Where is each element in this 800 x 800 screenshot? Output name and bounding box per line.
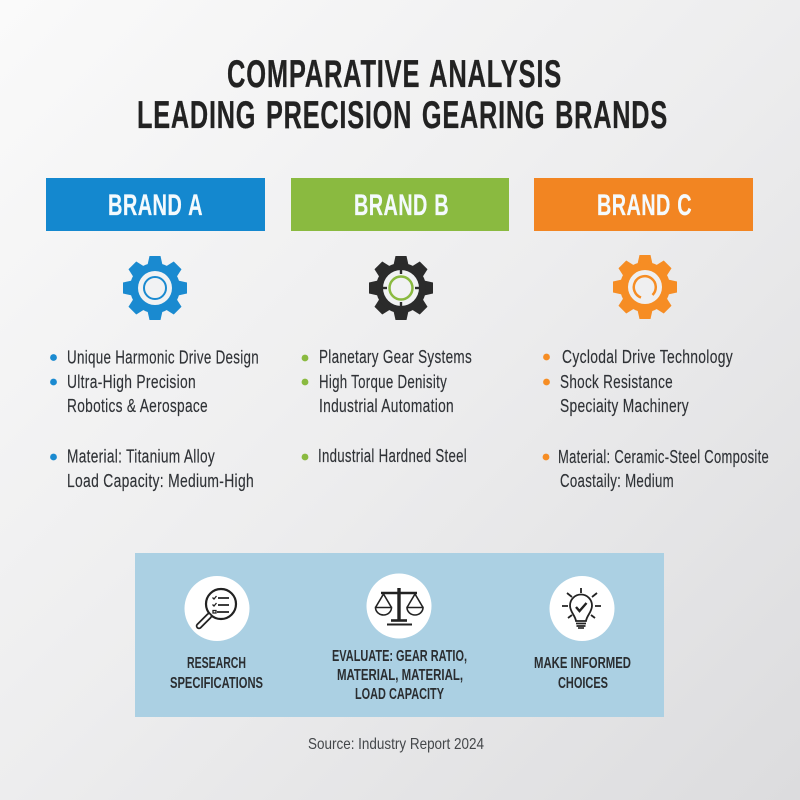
label: make informed choices: MAKE INFORMED — [534, 655, 631, 672]
panel: brand A header — [46, 178, 265, 231]
text block: brand B features: High Torque Denisity — [319, 372, 447, 392]
label: research specifications — [170, 655, 263, 692]
panel: brand A header: BRAND A — [108, 189, 203, 222]
panel: brand B header: BRAND B — [354, 189, 449, 222]
title — [137, 53, 668, 137]
text block: brand C specs: Coastaily: Medium — [560, 471, 674, 491]
label: make informed choices: CHOICES — [558, 675, 608, 692]
text block: brand A features: Ultra-High Precision — [67, 372, 196, 392]
text block: brand A specs: Material: Titanium Alloy — [67, 446, 215, 466]
label: evaluate — [332, 648, 467, 703]
label: make informed choices — [534, 655, 631, 692]
source note: Source: Industry Report 2024 — [308, 736, 484, 753]
label: research specifications: SPECIFICATIONS — [170, 675, 263, 692]
text block: brand A specs — [50, 446, 254, 491]
panel: decision steps — [135, 553, 664, 717]
text block: brand C features: Speciaity Machinery — [560, 396, 689, 416]
text block: brand A specs: Load Capacity: Medium-High — [67, 471, 254, 491]
title: COMPARATIVE ANALYSIS — [227, 53, 562, 96]
icon: magnifier with checklist — [184, 576, 250, 641]
text block: brand B features: Industrial Automation — [319, 396, 454, 416]
text block: brand C features: Shock Resistance — [560, 372, 673, 392]
label: evaluate: MATERIAL, MATERIAL, — [337, 667, 463, 684]
panel: brand B header — [291, 178, 509, 231]
text block: brand C specs — [543, 447, 769, 491]
icon: blue gear — [123, 256, 187, 320]
text block: brand B features: Planetary Gear Systems — [319, 347, 472, 367]
panel: brand C header: BRAND C — [597, 189, 692, 222]
icon: balance scale — [366, 574, 432, 638]
text block: brand A features — [50, 348, 259, 416]
icon: black gear — [369, 256, 433, 320]
text block: brand B features — [302, 347, 472, 416]
icon: light bulb with check — [550, 576, 614, 641]
text block: brand C features — [543, 347, 733, 416]
label: evaluate: EVALUATE: GEAR RATIO, — [332, 648, 467, 665]
text block: brand B specs — [302, 446, 467, 466]
icon: orange gear — [613, 255, 677, 319]
text block: brand C features: Cyclodal Drive Technology — [562, 347, 733, 367]
label: evaluate: LOAD CAPACITY — [355, 686, 444, 703]
text block: brand B specs: Industrial Hardned Steel — [318, 446, 467, 466]
panel: brand C header — [534, 178, 753, 231]
text block: brand A features: Unique Harmonic Drive Design — [67, 348, 259, 368]
text block: brand A features: Robotics & Aerospace — [67, 396, 208, 416]
label: research specifications: RESEARCH — [187, 655, 246, 672]
